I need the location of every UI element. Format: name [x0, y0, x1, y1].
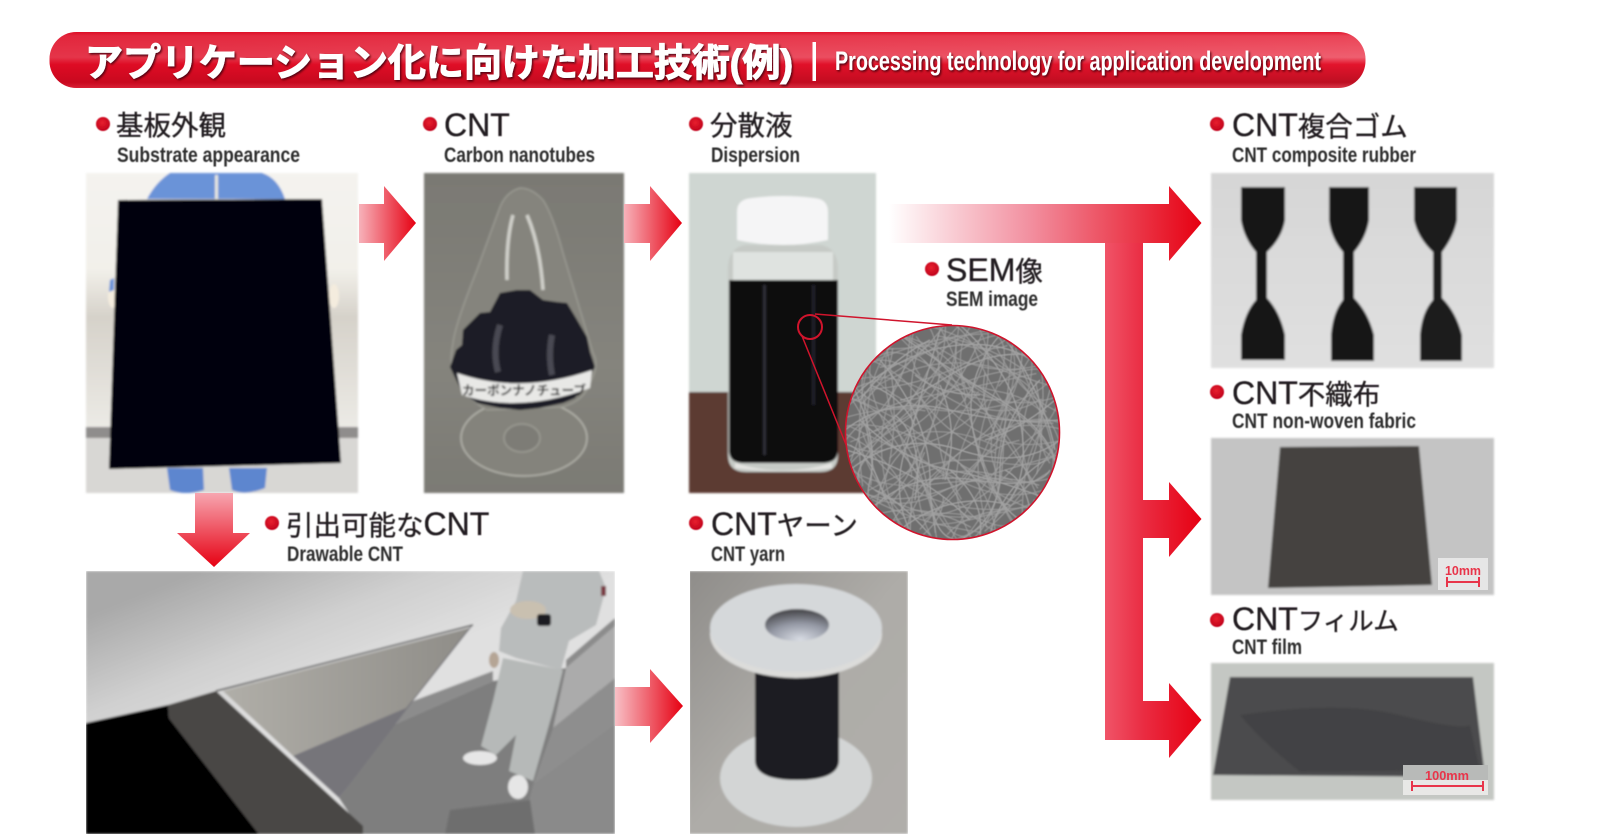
photo: CNT powder in flask — [424, 173, 624, 493]
label: SEM image: SEM image — [946, 288, 1038, 311]
label: CNT yarn: CNT yarn — [711, 543, 785, 566]
label: CNT non-woven fabric — [1210, 375, 1416, 433]
label: CNT composite rubber: CNT複合ゴム — [1232, 107, 1408, 143]
banner title: English: Processing technology for application development — [835, 46, 1321, 76]
label: CNT: CNT — [444, 107, 510, 143]
label: CNT film: CNTフィルム — [1232, 601, 1399, 637]
label: CNT film: CNT film — [1232, 636, 1302, 659]
label: CNT composite rubber: CNT composite rubber — [1232, 144, 1416, 167]
scale bar: 10mm — [1438, 558, 1488, 590]
photo: substrate held by person — [86, 173, 358, 493]
label: dispersion — [689, 110, 800, 167]
label: CNT non-woven fabric: CNT non-woven fabric — [1232, 410, 1416, 433]
label: substrate appearance — [96, 110, 300, 167]
arrow: CNT to dispersion — [624, 186, 682, 261]
photo: drawable CNT sheet and worker — [86, 571, 615, 834]
banner divider — [812, 42, 816, 81]
label: drawable CNT — [265, 506, 489, 566]
label: CNT composite rubber — [1210, 107, 1416, 167]
arrow: dispersion to applications (branching) — [889, 186, 1202, 758]
callout leader lines and bottle ring — [798, 314, 952, 484]
vertical trunk and lower branches — [1105, 243, 1202, 758]
label: CNT yarn — [689, 506, 858, 566]
label: CNT film — [1210, 601, 1399, 659]
label: CNT — [423, 107, 595, 167]
photo: dispersion bottle — [689, 173, 876, 493]
label: substrate appearance: Substrate appearance — [117, 144, 300, 167]
scale bar: 10mm: 10mm — [1445, 563, 1481, 578]
photo: CNT non-woven fabric — [1211, 438, 1494, 595]
banner title: Japanese: アプリケーション化に向けた加工技術(例) — [85, 43, 793, 85]
label: SEM image — [925, 252, 1043, 311]
worker figure — [481, 658, 563, 781]
label: substrate appearance: 基板外観 — [116, 110, 226, 141]
arrow: substrate to CNT — [359, 186, 416, 261]
label: SEM image: SEM像 — [946, 252, 1043, 288]
label: drawable CNT: Drawable CNT — [287, 543, 403, 566]
arrow: substrate down to drawable CNT — [177, 493, 250, 567]
label: dispersion: 分散液 — [710, 110, 792, 141]
scale bar: 100mm — [1403, 765, 1488, 795]
SEM magnified view callout — [797, 313, 1060, 540]
title banner — [50, 32, 1366, 88]
scale bar: 100mm: 100mm — [1425, 768, 1469, 783]
arrow: drawable CNT to yarn — [615, 669, 683, 743]
photo: CNT yarn spool — [689, 571, 908, 834]
label: dispersion: Dispersion — [711, 144, 800, 167]
photo: CNT film — [1211, 663, 1494, 800]
label: drawable CNT: 引出可能なCNT — [286, 506, 489, 542]
flask label text: カーボンナノチューブ — [462, 383, 586, 398]
label: CNT: Carbon nanotubes — [444, 144, 595, 167]
floor — [338, 667, 567, 834]
photo: CNT composite rubber dumbbells — [1211, 173, 1494, 368]
label: CNT non-woven fabric: CNT不織布 — [1232, 375, 1380, 411]
label: CNT yarn: CNTヤーン — [711, 506, 858, 542]
